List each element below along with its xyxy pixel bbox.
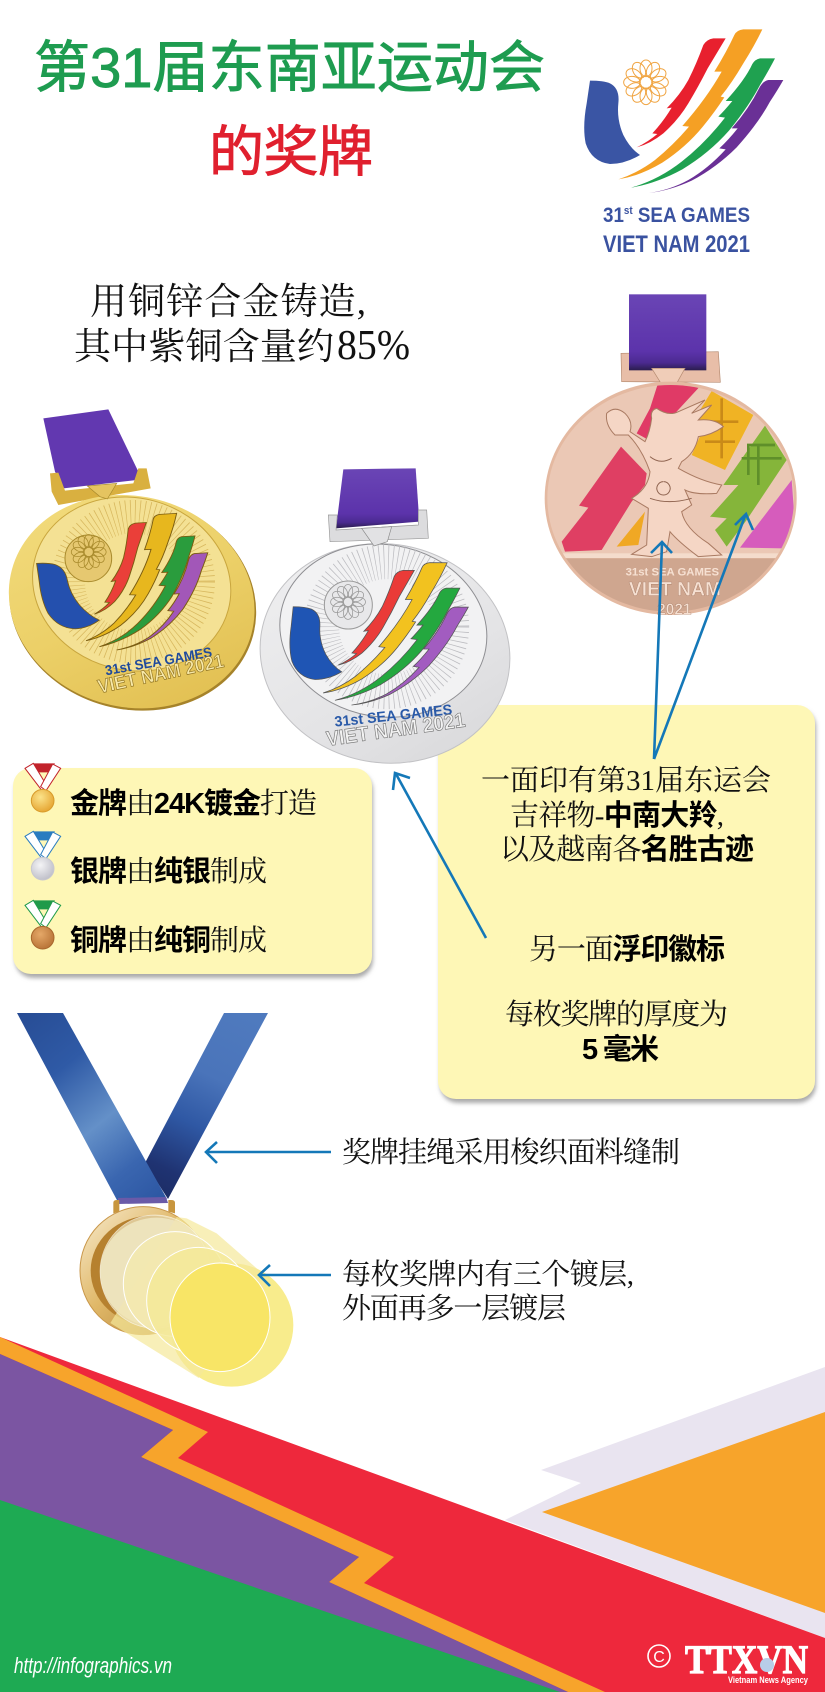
bronze medal photo with mascot [545,294,798,618]
footer: agency logo [648,1637,808,1685]
text: gold medal: 金牌由24K镀金打造 [70,787,317,820]
logo: 31st SEA Games [584,29,783,258]
text: thickness: 每枚奖牌的厚度为 [505,998,728,1031]
logo: 31st SEA Games: VIET NAM 2021 [603,231,750,258]
icon: bronze medal [25,900,61,949]
arrow: to emblem side [393,773,486,938]
illustration: medal with ribbon and layers [17,1013,293,1387]
text: ribbon note: 奖牌挂绳采用梭织面料缝制 [342,1136,680,1169]
gold medal photo [0,409,281,738]
ribbon [17,1013,268,1204]
text: mascot side: 吉祥物-中南大羚, [510,799,724,832]
footer: colour bands [0,1337,825,1692]
text: mascot side: 一面印有第31届东运会 [481,764,771,797]
logo: 31st SEA Games: SEA GAMES [633,204,750,227]
logo: 31st SEA Games: 31 [603,204,626,227]
text: bronze medal: 铜牌由纯铜制成 [70,924,267,957]
silver medal photo [243,468,527,783]
text: thickness [505,998,728,1066]
gold medal photo: VIET NAM 2021 [96,651,226,698]
icon: silver medal [25,831,61,880]
arrow: to ribbon [206,1142,331,1163]
text: thickness: 5 毫米 [582,1033,659,1066]
footer: agency logo: C [653,1649,665,1666]
text: plating note: 每枚奖牌内有三个镀层, [342,1258,634,1291]
logo: 31st SEA Games: st [624,205,633,217]
text: mascot side: 以及越南各名胜古迹 [500,833,754,866]
mascot [606,400,723,557]
arrows: to mascot and landmarks [651,514,753,759]
footer: agency logo: TTXVN [685,1637,808,1682]
bronze medal photo with mascot: VIET NAM [629,580,721,601]
medal layers [80,1200,293,1387]
footer: source url: http://infographics.vn [14,1653,172,1678]
gold medal photo: 31st SEA GAMES [104,644,213,678]
title: first line: 第31届东南亚运动会 [34,36,545,99]
panel: medal design notes [438,705,816,1103]
icon: gold medal [25,763,61,812]
text: alloy composition: 其中紫铜含量约 [74,326,334,368]
text: silver medal: 银牌由纯银制成 [70,855,267,888]
panel: medal materials [13,763,373,978]
text: alloy composition: 用铜锌合金铸造, [90,281,366,323]
arrow: to plating [259,1265,331,1286]
silver medal photo: VIET NAM 2021 [325,709,467,751]
text: alloy composition [74,281,410,369]
text: alloy composition: 85% [337,323,410,369]
bronze medal photo with mascot: 2021 [657,601,692,618]
silver medal photo: 31st SEA GAMES [334,702,453,731]
text: plating note [342,1258,634,1325]
footer: agency logo: Vietnam News Agency [728,1675,808,1685]
bronze medal photo with mascot: 31st SEA GAMES [626,567,719,579]
text: plating note: 外面再多一层镀层 [342,1292,566,1325]
text: emblem side: 另一面浮印徽标 [529,933,725,966]
title: second line: 的奖牌 [209,121,373,183]
text: mascot side [481,764,771,866]
